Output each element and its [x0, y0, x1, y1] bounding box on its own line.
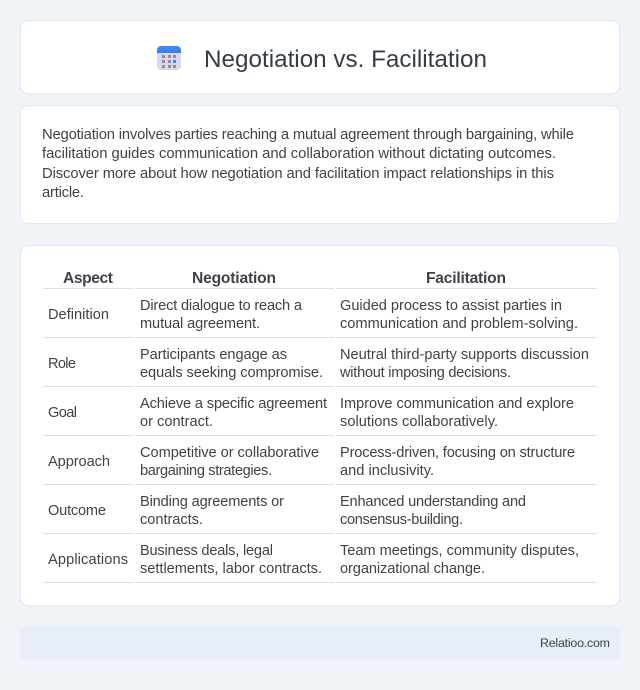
table column headers [63, 270, 506, 287]
row: approach: and inclusivity. [340, 463, 434, 479]
intro text: facilitation guides communication and collaboration without dictating outcomes. [42, 146, 556, 162]
footer source text: Relatioo.com [540, 636, 610, 650]
title: Negotiation vs. Facilitation [204, 46, 487, 73]
row: role: Participants engage as [140, 347, 287, 363]
row: approach: Process-driven, focusing on structure [340, 445, 575, 461]
panel: introduction [20, 106, 620, 224]
row: outcome: Outcome [48, 503, 106, 519]
row: goal: or contract. [140, 414, 213, 430]
row: outcome [48, 494, 526, 528]
row: approach [48, 445, 575, 479]
row: definition [48, 298, 578, 332]
row: goal: Improve communication and explore [340, 396, 574, 412]
row: outcome: Binding agreements or [140, 494, 284, 510]
row: role: Neutral third-party supports discussion [340, 347, 589, 363]
intro text [42, 127, 574, 201]
intro text: article. [42, 185, 84, 201]
row: definition: communication and problem-solving. [340, 316, 578, 332]
footer [20, 626, 620, 660]
panel: header [20, 20, 620, 94]
row: role: without imposing decisions. [339, 365, 511, 381]
row: approach: Competitive or collaborative [140, 445, 319, 461]
row: goal [48, 396, 574, 430]
row: goal: Achieve a specific agreement [140, 396, 327, 412]
table column headers: Facilitation [426, 270, 506, 287]
table column headers: Aspect [63, 270, 113, 287]
panel: comparison table [20, 246, 620, 606]
row: outcome: contracts. [140, 512, 203, 528]
row: goal: solutions collaboratively. [340, 414, 498, 430]
row: applications: Applications [48, 552, 128, 568]
row: applications: settlements, labor contracts. [140, 561, 322, 577]
row: role [48, 347, 589, 381]
row: goal: Goal [48, 405, 77, 421]
table column headers: Negotiation [192, 270, 276, 287]
row: applications: Team meetings, community disputes, [340, 543, 579, 559]
row: definition: Definition [48, 307, 109, 323]
row: role: Role [48, 356, 76, 372]
row: applications [48, 543, 579, 577]
row: role: equals seeking compromise. [140, 365, 323, 381]
row: definition: Direct dialogue to reach a [140, 298, 303, 314]
row: outcome: Enhanced understanding and [340, 494, 526, 510]
row: applications: organizational change. [340, 561, 485, 577]
row: approach: Approach [48, 454, 110, 470]
icon: calendar [157, 46, 181, 70]
row: definition: Guided process to assist parties in [340, 298, 562, 314]
intro text: Discover more about how negotiation and facilitation impact relationships in this [42, 166, 554, 182]
row: outcome: consensus-building. [340, 512, 463, 528]
row: approach: bargaining strategies. [140, 463, 272, 479]
intro text: Negotiation involves parties reaching a mutual agreement through bargaining, while [42, 127, 574, 143]
row: definition: mutual agreement. [140, 316, 260, 332]
row: applications: Business deals, legal [140, 543, 273, 559]
